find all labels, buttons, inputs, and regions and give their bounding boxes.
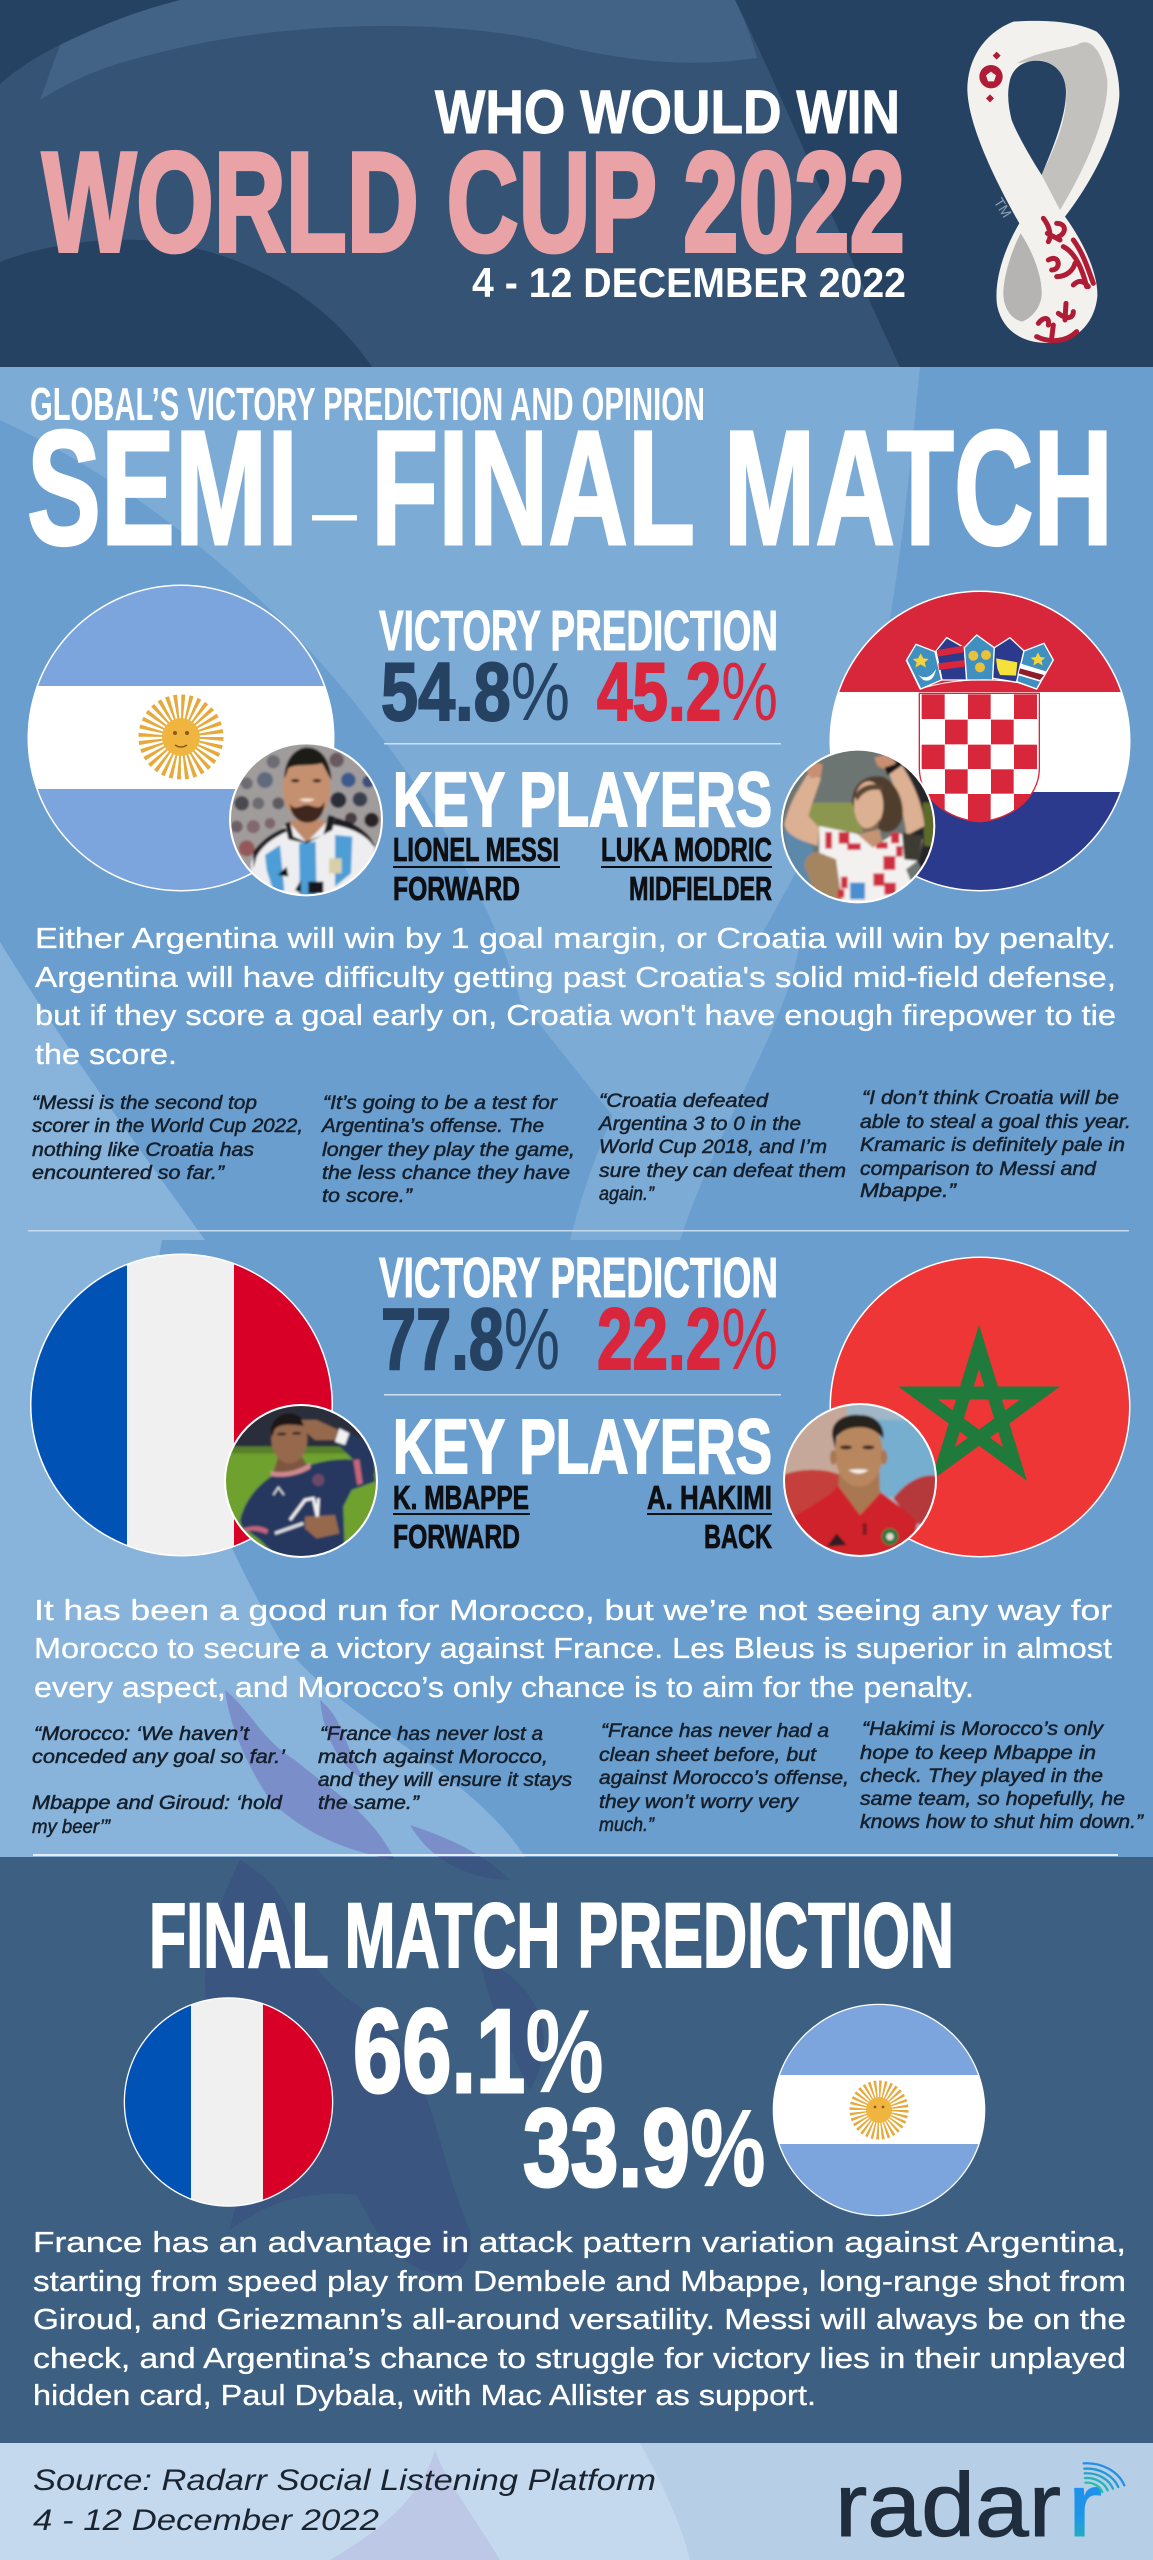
source note [33, 2464, 656, 2537]
quote 2: “It’s going to be a test for [323, 1093, 558, 1114]
photo: kylian mbappe [220, 1400, 380, 1560]
key players: argentina vs croatia: MIDFIELDER [629, 870, 772, 907]
flag: france final [120, 1995, 335, 2210]
quote 3: World Cup 2018, and I’m [599, 1137, 827, 1158]
icon: radar waves [1084, 2463, 1124, 2492]
title: semi-final match: SEMI [27, 396, 298, 579]
key players: argentina vs croatia: LUKA MODRIC [601, 831, 772, 868]
icon: world cup emblem [967, 21, 1119, 343]
photo: luka modric [780, 750, 936, 904]
quote 1: nothing like Croatia has [32, 1140, 255, 1161]
text block: final match analysis [33, 2227, 1126, 2412]
quote 4: Kramaric is definitely pale in [860, 1135, 1125, 1156]
icon: croatian coat of arms [906, 635, 1053, 822]
quote 2 [321, 1093, 575, 1207]
quote 8: knows how to shut him down.” [860, 1812, 1145, 1833]
quote 1 [32, 1093, 303, 1184]
victory prediction: france vs morocco [379, 1246, 778, 1388]
quote 3 [598, 1091, 846, 1205]
flag: morocco [830, 1256, 1130, 1558]
panel: footer background [0, 2443, 1153, 2560]
key players: france vs morocco: A. HAKIMI [647, 1479, 772, 1516]
panel: header background [0, 0, 1153, 367]
quote 5 [32, 1724, 286, 1838]
quote 2: Argentina’s offense. The [321, 1116, 544, 1137]
quote 7 [599, 1721, 849, 1836]
percentage: morocco: 22.2% [597, 1291, 778, 1388]
quote 5: Mbappe and Giroud: ‘hold [32, 1793, 284, 1814]
quote 5: conceded any goal so far.’ [32, 1747, 286, 1768]
flag: croatia [825, 585, 1135, 897]
flag: argentina [20, 580, 340, 899]
victory prediction: argentina vs croatia [379, 599, 778, 738]
panel: semi-final background [0, 367, 1153, 1857]
quote 6: “France has never lost a [320, 1724, 543, 1745]
text block: argentina vs croatia analysis: Argentina will have difficulty getting past Croatia's solid mid-field defense, [35, 962, 1116, 994]
quote 8: same team, so hopefully, he [860, 1789, 1125, 1810]
quote 4 [860, 1088, 1131, 1202]
victory prediction: argentina vs croatia: VICTORY PREDICTION [379, 599, 778, 663]
text block: final match analysis: check, and Argentina’s chance to struggle for victory lies in their unplayed [33, 2343, 1126, 2375]
text block: argentina vs croatia analysis [35, 923, 1116, 1071]
quote 8: check. They played in the [860, 1766, 1103, 1787]
title: semi-final match: – [312, 466, 358, 555]
quote 4: able to steal a goal this year. [860, 1112, 1131, 1133]
quote 3: again.” [599, 1184, 656, 1205]
quote 3: sure they can defeat them [599, 1161, 846, 1182]
text block: argentina vs croatia analysis: Either Argentina will win by 1 goal margin, or Croatia will win by penalty. [35, 923, 1116, 955]
quote 5: “Morocco: ‘We haven’t [34, 1724, 250, 1745]
key players: argentina vs croatia [393, 757, 772, 907]
text block: final match analysis: hidden card, Paul Dybala, with Mac Allister as support. [33, 2380, 816, 2412]
title: semi-final match [27, 396, 1113, 579]
key players: france vs morocco: K. MBAPPE [393, 1479, 529, 1516]
quote 7: “France has never had a [601, 1721, 829, 1742]
percentage: argentina: 54.8% [381, 645, 570, 738]
quote 3: Argentina 3 to 0 in the [598, 1114, 801, 1135]
quote 1: scorer in the World Cup 2022, [32, 1116, 303, 1137]
quote 5: my beer’” [32, 1817, 112, 1838]
percentage: croatia: 45.2% [597, 645, 778, 738]
quote 6: the same.” [318, 1793, 421, 1814]
panel: header [42, 21, 1119, 343]
percentage: argentina final: 33.9% [523, 2087, 766, 2210]
quote 8: hope to keep Mbappe in [860, 1743, 1096, 1764]
quote 4: Mbappe.” [860, 1181, 958, 1202]
panel: final background [0, 1857, 1153, 2443]
text block: france vs morocco analysis [34, 1595, 1112, 1704]
quote 8 [860, 1719, 1145, 1833]
text block: final match analysis: Giroud, and Griezmann’s all-around versatility. Messi will always be on the [33, 2304, 1126, 2336]
icon: green pentagram [918, 1347, 1040, 1464]
text block: france vs morocco analysis: Morocco to secure a victory against France. Les Bleus is superior in almost [34, 1633, 1112, 1665]
text block: france vs morocco analysis: It has been a good run for Morocco, but we’re not seeing any way for [34, 1595, 1112, 1627]
logo: radarr: radar [835, 2456, 1061, 2556]
text block: final match analysis: starting from speed play from Dembele and Mbappe, long-range shot from [33, 2266, 1126, 2298]
key players: argentina vs croatia: FORWARD [393, 870, 520, 907]
quote 4: “I don’t think Croatia will be [862, 1088, 1119, 1109]
quote 8: “Hakimi is Morocco’s only [862, 1719, 1105, 1740]
quote 6 [318, 1724, 573, 1814]
quote 6: and they will ensure it stays [318, 1770, 573, 1791]
heading: global's victory prediction and opinion: GLOBAL’S VICTORY PREDICTION AND OPINION [30, 378, 705, 430]
quote 3: “Croatia defeated [599, 1091, 770, 1112]
quote 1: “Messi is the second top [32, 1093, 257, 1114]
flag: argentina final [770, 2000, 990, 2219]
text block: france vs morocco analysis: every aspect, and Morocco’s only chance is to aim for the penalty. [34, 1672, 974, 1704]
photo: lionel messi [225, 740, 385, 900]
icon: world cup emblem: TM [991, 195, 1015, 220]
quote 7: against Morocco’s offense, [599, 1768, 849, 1789]
photo: achraf hakimi [780, 1400, 940, 1560]
quote 6: match against Morocco, [318, 1747, 548, 1768]
quote 7: they won’t worry very [599, 1792, 800, 1813]
quote 1: encountered so far.” [32, 1163, 226, 1184]
key players: france vs morocco: FORWARD [393, 1518, 520, 1555]
source note: 4 - 12 December 2022 [33, 2504, 379, 2537]
flag: france [30, 1250, 334, 1560]
quote 7: clean sheet before, but [599, 1745, 817, 1766]
percentage: france final: 66.1% [353, 1985, 604, 2118]
quote 2: longer they play the game, [322, 1140, 575, 1161]
text block: argentina vs croatia analysis: but if they score a goal early on, Croatia won't have enough firepower to tie [35, 1000, 1116, 1032]
heading: who would win: WHO WOULD WIN [435, 78, 900, 146]
victory prediction: france vs morocco: VICTORY PREDICTION [379, 1246, 778, 1310]
quote 7: much.” [599, 1815, 656, 1836]
logo: radarr: r [1068, 2456, 1102, 2556]
quote 2: to score.” [322, 1186, 414, 1207]
quote 2: the less chance they have [322, 1163, 570, 1184]
quote 4: comparison to Messi and [860, 1159, 1098, 1180]
text block: final match analysis: France has an advantage in attack pattern variation against Argentina, [33, 2227, 1126, 2259]
key players: argentina vs croatia: KEY PLAYERS [393, 757, 772, 843]
key players: france vs morocco: BACK [704, 1518, 772, 1555]
key players: france vs morocco [393, 1404, 772, 1555]
key players: argentina vs croatia: LIONEL MESSI [393, 831, 559, 868]
source note: Source: Radarr Social Listening Platform [33, 2464, 656, 2497]
text block: argentina vs croatia analysis: the score. [35, 1039, 177, 1071]
percentage: france: 77.8% [381, 1291, 560, 1388]
key players: france vs morocco: KEY PLAYERS [393, 1404, 772, 1490]
date: 4 - 12 DECEMBER 2022 [472, 259, 906, 306]
